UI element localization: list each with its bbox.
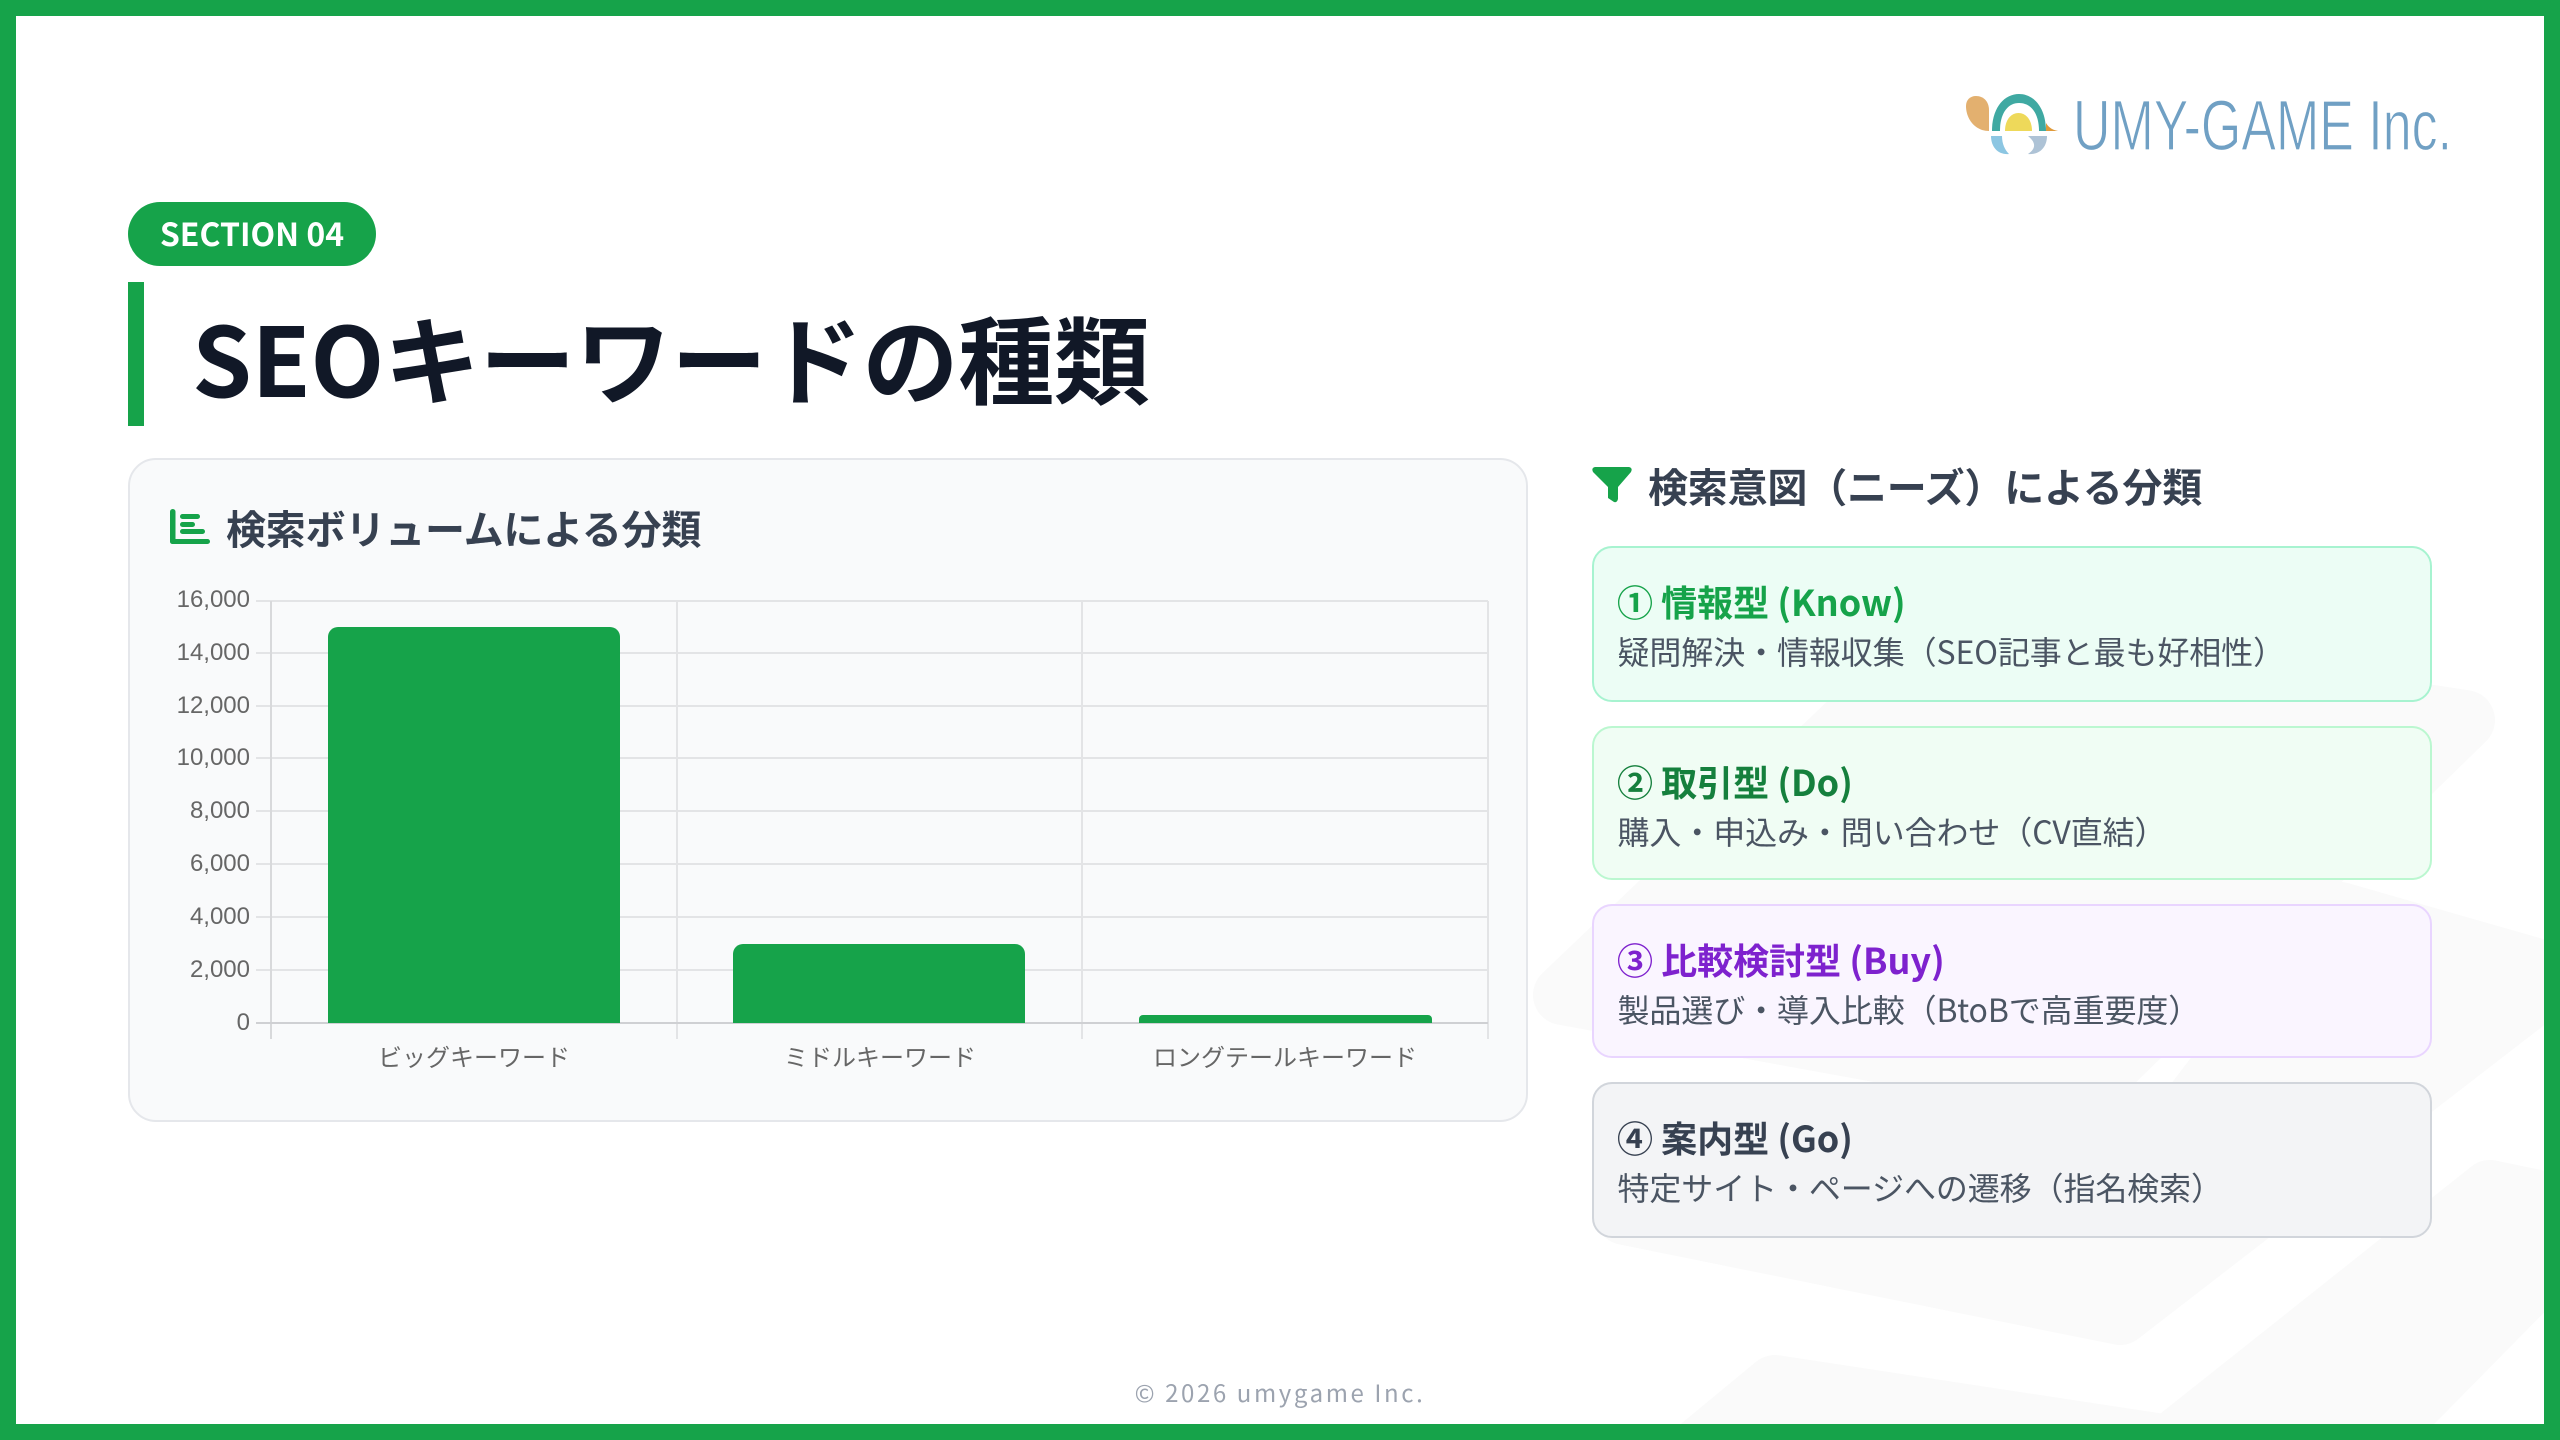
- y-axis labels: 10,000: [177, 744, 250, 771]
- right column heading: 検索意図（ニーズ）による分類: [1648, 456, 2202, 514]
- icon: funnel: [1592, 467, 1632, 502]
- y-axis labels: 16,000: [177, 586, 250, 613]
- x-axis labels: [378, 1045, 1417, 1072]
- title: SEOキーワードの種類: [192, 286, 1150, 425]
- card title: ② 取引型 (Do): [1617, 755, 1853, 807]
- y-axis labels: 0: [237, 1009, 250, 1036]
- panel: search volume: [128, 458, 1528, 1122]
- icon: logo mark: [1966, 94, 2058, 154]
- y-axis labels: 8,000: [190, 797, 250, 824]
- panel heading: 検索ボリュームによる分類: [226, 498, 701, 556]
- card text: 製品選び・導入比較（BtoBで高重要度）: [1618, 986, 2200, 1032]
- bars: [328, 627, 1432, 1023]
- y-axis labels: 12,000: [177, 692, 250, 719]
- bar chart: [177, 586, 1489, 1072]
- card: navigational: [1592, 1082, 2432, 1238]
- card: informational: [1592, 546, 2432, 702]
- title accent bar: [128, 282, 144, 426]
- card text: 疑問解決・情報収集（SEO記事と最も好相性）: [1618, 628, 2285, 674]
- section badge: SECTION 04: [160, 210, 344, 256]
- card: transactional: [1592, 726, 2432, 880]
- icon: bar chart: [170, 509, 210, 544]
- card text: 特定サイト・ページへの遷移（指名検索）: [1618, 1164, 2223, 1210]
- x-axis labels: ミドルキーワード: [784, 1045, 976, 1072]
- x-axis labels: ロングテールキーワード: [1153, 1045, 1417, 1072]
- card title: ① 情報型 (Know): [1617, 575, 1906, 627]
- card title: ④ 案内型 (Go): [1617, 1111, 1853, 1163]
- logo: [1966, 87, 2452, 166]
- card title: ③ 比較検討型 (Buy): [1617, 933, 1945, 985]
- y-axis labels: 14,000: [177, 639, 250, 666]
- y-axis labels: 4,000: [190, 903, 250, 930]
- card text: 購入・申込み・問い合わせ（CV直結）: [1618, 808, 2166, 854]
- y-axis labels: [177, 586, 250, 1036]
- x-axis labels: ビッグキーワード: [378, 1045, 570, 1072]
- card: comparison: [1592, 904, 2432, 1058]
- section badge: [128, 202, 376, 266]
- y-axis labels: 2,000: [190, 956, 250, 983]
- y-axis labels: 6,000: [190, 850, 250, 877]
- footer: © 2026 umygame Inc.: [1135, 1374, 1425, 1409]
